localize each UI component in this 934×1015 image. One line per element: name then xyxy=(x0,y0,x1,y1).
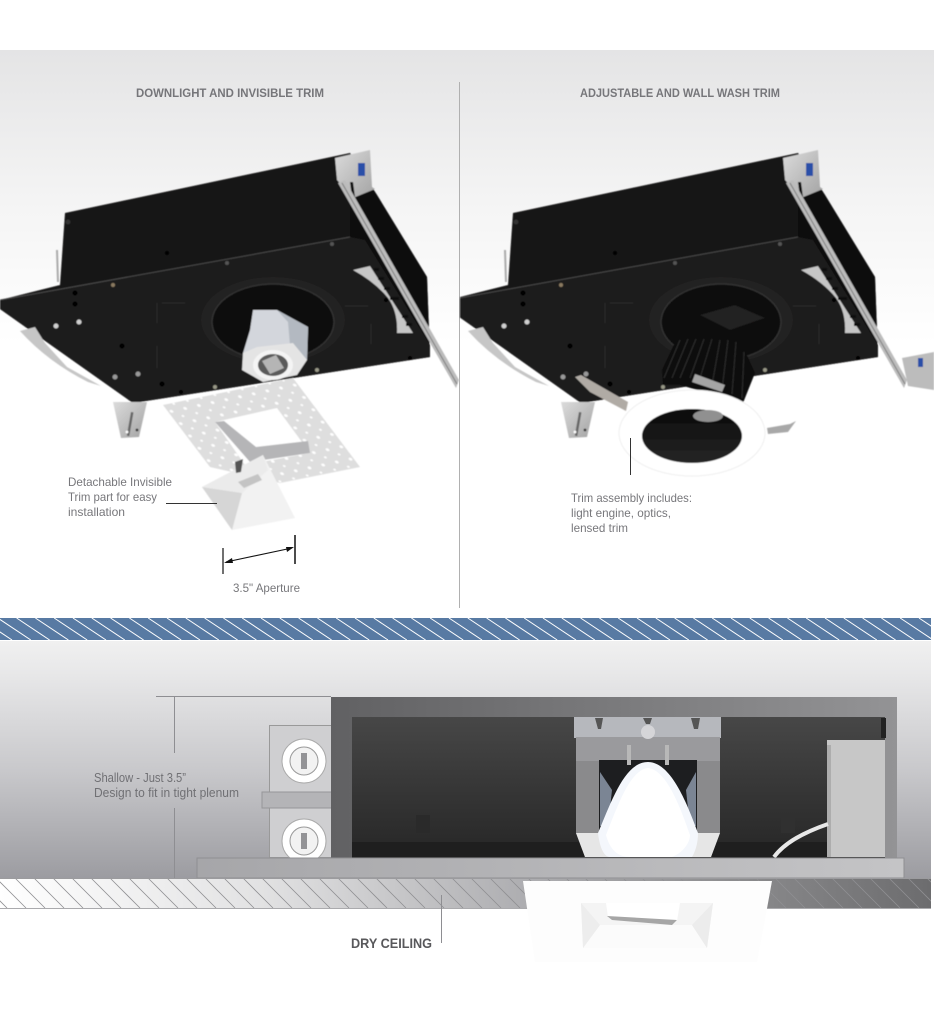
panel: product views xyxy=(0,50,934,608)
callout: trim assembly: lensed trim xyxy=(571,521,628,535)
mounting bracket with screws xyxy=(262,726,332,863)
trim seen from below xyxy=(523,881,772,962)
light module xyxy=(574,717,721,857)
heading: adjustable and wall wash trim: ADJUSTABLE AND WALL WASH TRIM xyxy=(580,86,780,100)
product photo: housing with adjustable trim xyxy=(448,150,934,476)
trim flange with perforations xyxy=(163,378,360,483)
callout: dry ceiling xyxy=(351,895,442,951)
callout: trim assembly xyxy=(571,438,692,535)
callout: detachable invisible trim: Detachable Invisible xyxy=(68,475,172,489)
label: shallow: Shallow - Just 3.5” xyxy=(94,771,186,785)
divider band: blue hatch xyxy=(0,618,934,640)
dimension arrow: aperture xyxy=(223,535,295,574)
flange xyxy=(197,858,904,878)
label: aperture: 3.5" Aperture xyxy=(233,581,300,595)
callout: trim assembly: Trim assembly includes: xyxy=(571,491,692,505)
dimension line: plenum depth xyxy=(156,696,331,878)
callout: detachable invisible trim: installation xyxy=(68,505,125,519)
housing section xyxy=(331,697,897,858)
product photo: housing with invisible trim xyxy=(0,150,459,530)
heading: downlight and invisible trim: DOWNLIGHT AND INVISIBLE TRIM xyxy=(136,86,324,100)
callout: dry ceiling: DRY CEILING xyxy=(351,935,432,951)
driver box and wire xyxy=(774,740,885,857)
callout: detachable invisible trim: Trim part for easy xyxy=(68,490,157,504)
panel: cross-section diagram xyxy=(0,641,931,878)
callout: detachable invisible trim xyxy=(68,475,217,519)
label: shallow: Design to fit in tight plenum xyxy=(94,786,239,800)
dry ceiling strip xyxy=(0,878,934,908)
callout: trim assembly: light engine, optics, xyxy=(571,506,671,520)
